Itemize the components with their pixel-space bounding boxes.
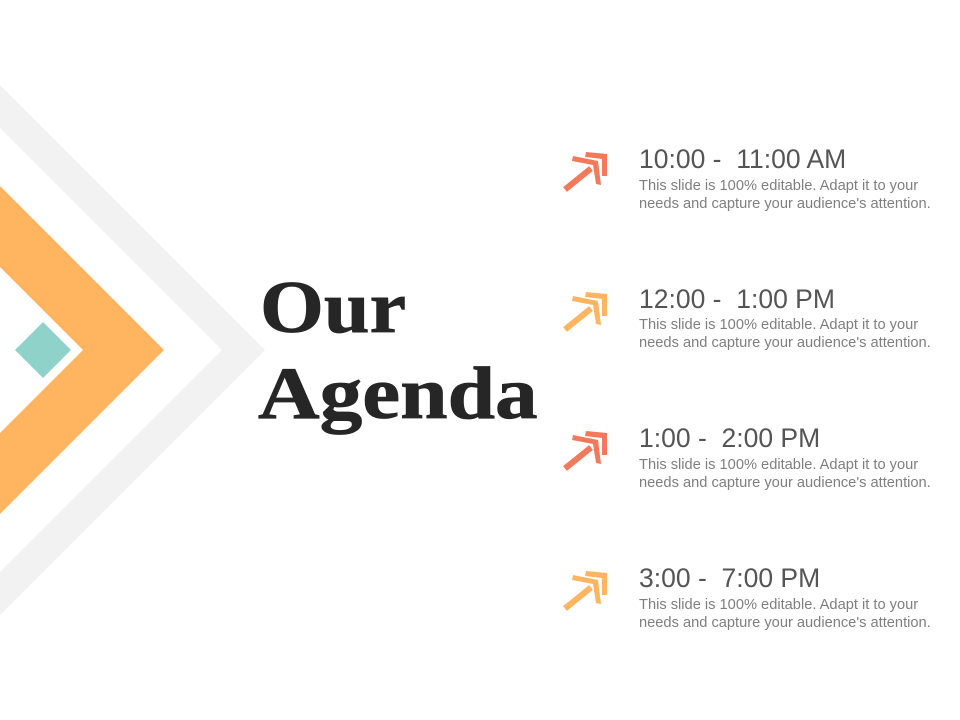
description: needs and capture your audience's attention. (639, 615, 931, 631)
time: 12:00 - 1:00 PM (639, 284, 835, 314)
description: This slide is 100% editable. Adapt it to your (639, 457, 918, 473)
time: 1:00 - 2:00 PM (639, 423, 820, 453)
description (639, 178, 931, 212)
description: This slide is 100% editable. Adapt it to your (639, 597, 918, 613)
title: Agenda (258, 353, 538, 435)
time: 10:00 - 11:00 AM (639, 144, 846, 174)
description: This slide is 100% editable. Adapt it to your (639, 178, 918, 194)
icon: orange arrow (563, 571, 607, 611)
teal diamond (15, 322, 71, 378)
description (639, 597, 931, 631)
description (639, 317, 931, 351)
title (258, 267, 538, 435)
gray outer chevron (0, 85, 265, 615)
description (639, 457, 931, 491)
agenda item 1 (563, 144, 931, 212)
agenda item 2 (563, 284, 931, 351)
icon: coral arrow (563, 152, 607, 192)
icon: orange arrow (563, 292, 607, 332)
description: needs and capture your audience's attention. (639, 196, 931, 212)
description: This slide is 100% editable. Adapt it to your (639, 317, 918, 333)
orange chevron (0, 186, 164, 514)
title: Our (260, 267, 406, 349)
icon: coral arrow (563, 431, 607, 471)
agenda item 3 (563, 423, 931, 491)
description: needs and capture your audience's attention. (639, 335, 931, 351)
agenda item 4 (563, 563, 931, 631)
description: needs and capture your audience's attention. (639, 475, 931, 491)
time: 3:00 - 7:00 PM (639, 563, 820, 593)
chevron graphic (0, 86, 264, 614)
